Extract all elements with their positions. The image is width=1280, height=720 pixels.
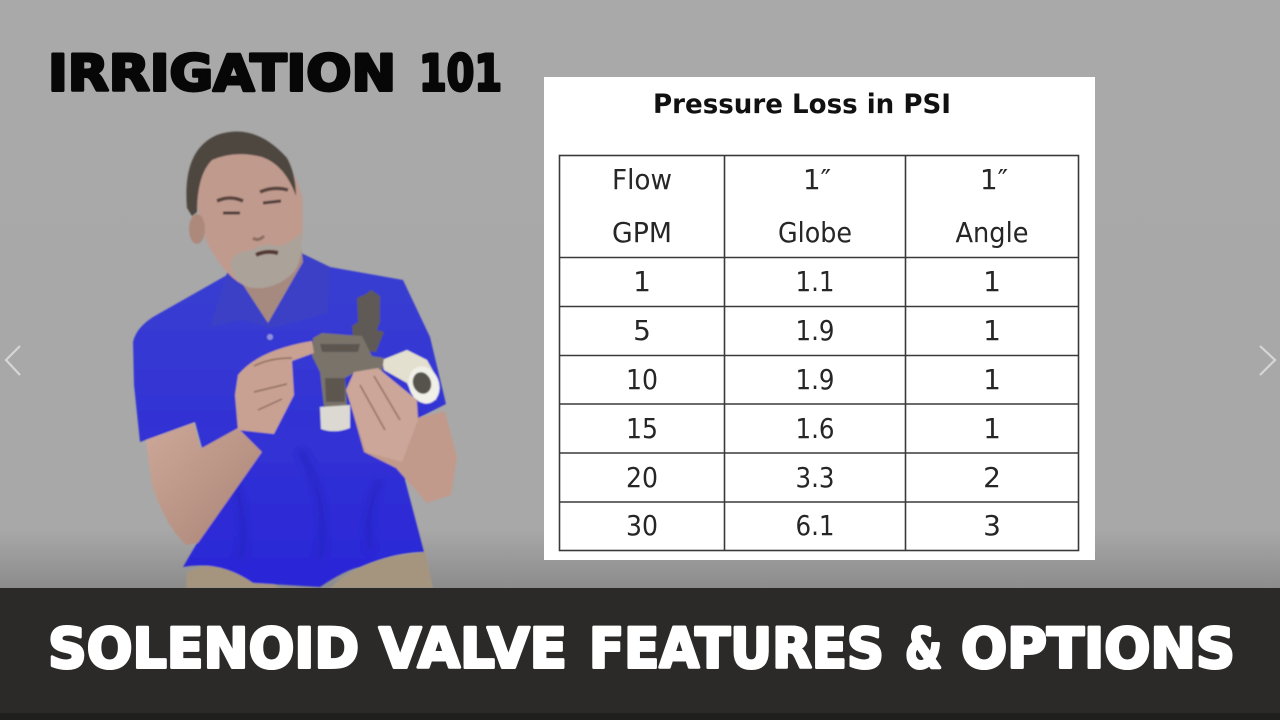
- table text: 1.1: [796, 265, 834, 298]
- beard: [231, 232, 302, 288]
- pipe mouth: [403, 362, 445, 408]
- table text: Angle: [956, 216, 1028, 249]
- table text: 1″: [980, 163, 1008, 196]
- table text: 1.6: [796, 412, 834, 445]
- collar: [210, 253, 330, 328]
- lower pipe: [320, 405, 350, 431]
- table text: 10: [626, 363, 658, 396]
- table text: 15: [626, 412, 658, 445]
- left arm: [146, 423, 262, 545]
- left arrow: [6, 346, 20, 375]
- subtitle: VALVE: [379, 616, 567, 680]
- table text: 1.9: [796, 314, 834, 347]
- hair: [186, 132, 296, 216]
- shirt: [133, 253, 446, 587]
- right hand: [346, 368, 418, 462]
- face: [197, 148, 303, 288]
- subtitle: [48, 616, 1235, 680]
- table text: 1: [983, 265, 1001, 298]
- table text: 6.1: [796, 509, 834, 542]
- left hand: [235, 341, 314, 434]
- title: 101: [419, 44, 502, 102]
- table text: 1.9: [796, 363, 834, 396]
- subtitle: FEATURES: [589, 616, 884, 680]
- right arm: [348, 370, 457, 503]
- table text: 30: [626, 509, 658, 542]
- subtitle: SOLENOID: [48, 616, 359, 680]
- subtitle: &: [905, 616, 942, 680]
- right arrow: [1260, 346, 1275, 375]
- presenter holding valve: [133, 132, 457, 588]
- table text: 2: [983, 461, 1001, 494]
- subtitle: OPTIONS: [961, 616, 1235, 680]
- neck: [232, 235, 303, 323]
- table text: GPM: [612, 216, 672, 249]
- elbow fitting: [382, 350, 438, 400]
- shirt folds: [230, 450, 380, 560]
- title: IRRIGATION: [48, 44, 396, 102]
- button placket: [267, 334, 273, 340]
- trousers: [186, 552, 433, 588]
- table grid: [559, 155, 1078, 550]
- bottom title bar: [0, 588, 1280, 720]
- table text: 1: [983, 314, 1001, 347]
- table text: 3: [983, 509, 1001, 542]
- brows, eyes, nose and mouth: [217, 188, 288, 201]
- table text: Flow: [612, 163, 672, 196]
- pressure loss table panel: [544, 77, 1095, 560]
- table text: 1: [633, 265, 651, 298]
- table text: 5: [633, 314, 651, 347]
- table heading: Pressure Loss in PSI: [653, 89, 951, 120]
- valve body: [312, 333, 384, 407]
- table text: 3.3: [796, 461, 834, 494]
- ear: [189, 214, 205, 244]
- table text: 20: [626, 461, 658, 494]
- solenoid top: [352, 290, 384, 352]
- table text: Globe: [778, 216, 852, 249]
- table text: [612, 163, 1028, 542]
- table text: 1: [983, 412, 1001, 445]
- table text: 1″: [803, 163, 831, 196]
- table text: 1: [983, 363, 1001, 396]
